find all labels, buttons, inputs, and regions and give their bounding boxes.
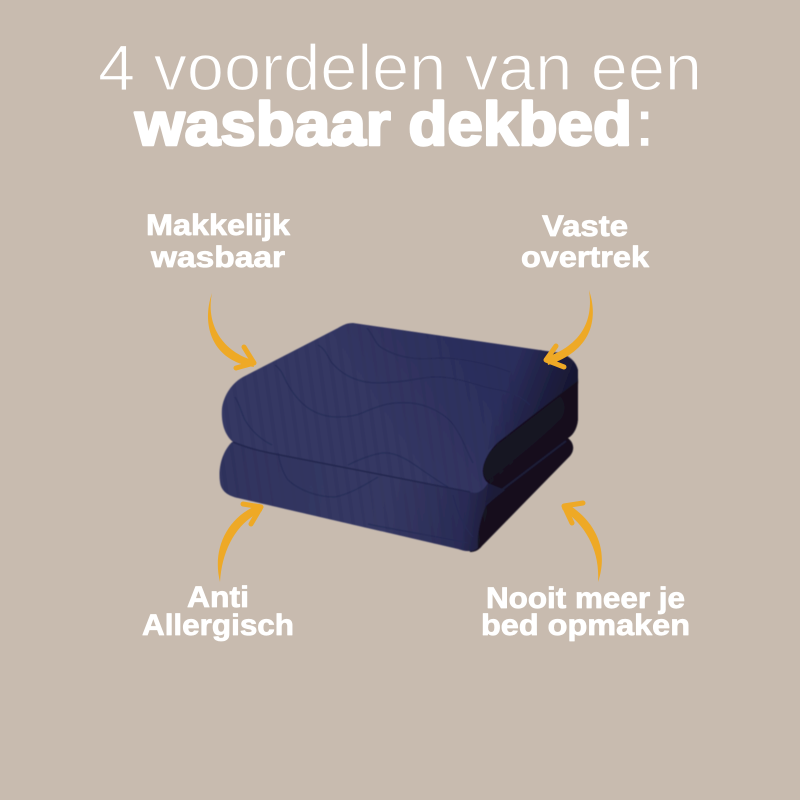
label: anti allergisch: Anti bbox=[187, 581, 249, 614]
label: anti allergisch bbox=[142, 581, 294, 642]
title line 1: 4 voordelen van een bbox=[98, 31, 702, 104]
title bbox=[98, 31, 702, 159]
quilting stitches bbox=[235, 328, 530, 543]
dark right side bbox=[460, 350, 578, 552]
lower layer stripes bbox=[478, 506, 487, 546]
title line 2: wasbaar dekbed bbox=[134, 90, 632, 158]
crease between layers bbox=[233, 442, 470, 492]
arrow: bottom right bbox=[562, 503, 602, 582]
shaded right corner bbox=[488, 345, 578, 450]
label: anti allergisch: Allergisch bbox=[142, 609, 294, 642]
upper layer bbox=[222, 323, 578, 493]
label: makkelijk wasbaar bbox=[146, 209, 291, 274]
arrow: top left bbox=[208, 293, 254, 368]
label: nooit meer je bed opmaken bbox=[481, 582, 690, 642]
rolled fold inside bbox=[484, 396, 565, 481]
label: nooit meer je bed opmaken: Nooit meer je bbox=[486, 582, 685, 615]
lower fold edge bbox=[486, 441, 566, 502]
arrow: top right bbox=[546, 290, 593, 367]
label: vaste overtrek: Vaste bbox=[542, 210, 628, 243]
label: vaste overtrek bbox=[521, 210, 650, 274]
arrow: bottom left bbox=[218, 504, 262, 582]
label: nooit meer je bed opmaken: bed opmaken bbox=[481, 609, 690, 642]
upper layer stripes bbox=[490, 434, 513, 484]
label: makkelijk wasbaar: wasbaar bbox=[150, 241, 286, 274]
lower layer bbox=[220, 442, 505, 551]
illustration: folded navy duvet bbox=[215, 320, 578, 555]
title colon: : bbox=[636, 90, 653, 159]
label: vaste overtrek: overtrek bbox=[521, 241, 650, 274]
label: makkelijk wasbaar: Makkelijk bbox=[146, 209, 291, 242]
